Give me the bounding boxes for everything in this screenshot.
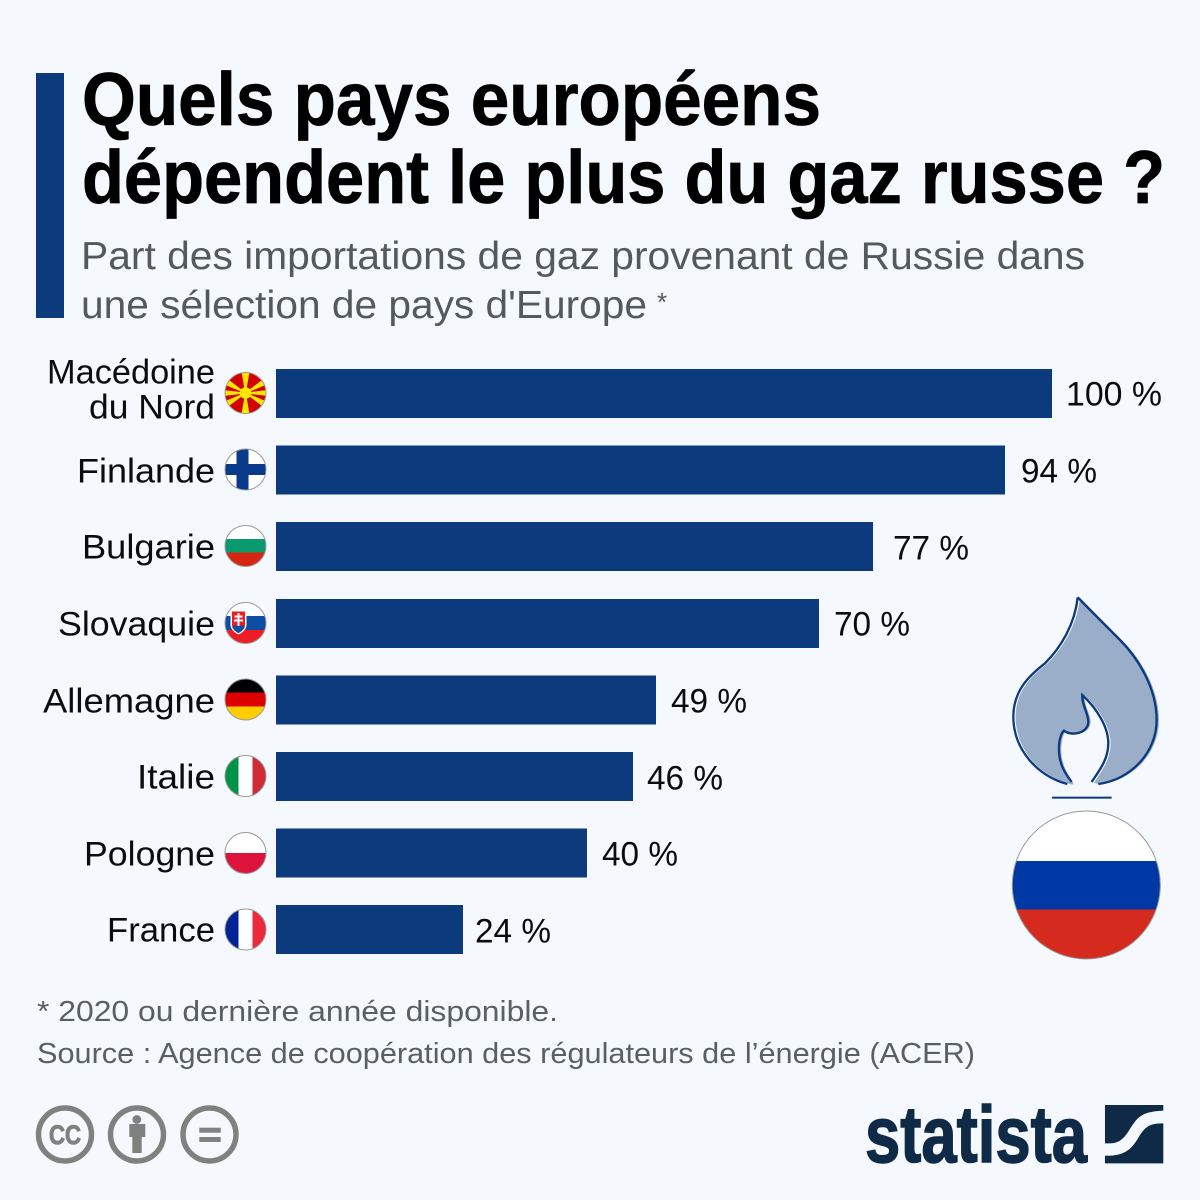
row: Macédoine du Nord: 100 % <box>1066 376 1162 414</box>
row: France <box>107 905 551 954</box>
source: Source : Agence de coopération des régulateurs de l’énergie (ACER) <box>37 1038 975 1070</box>
row: Macédoine du Nord: Macédoine <box>47 354 215 392</box>
row: Allemagne: 49 % <box>671 682 747 720</box>
icon: Russian flag <box>1010 810 1162 960</box>
title: Quels pays européens <box>82 57 821 141</box>
row: Bulgarie: Bulgarie <box>82 528 215 566</box>
subtitle: une sélection de pays d'Europe <box>81 284 647 327</box>
row: Italie <box>137 752 723 801</box>
subtitle: * <box>657 287 667 317</box>
icon: gas flame <box>1013 597 1159 799</box>
footnote: * 2020 ou dernière année disponible. <box>37 996 558 1028</box>
title <box>82 57 1165 219</box>
row: Finlande <box>77 446 1097 494</box>
row: France: France <box>107 912 215 950</box>
row: Finlande: 94 % <box>1021 452 1097 490</box>
row: France: 24 % <box>475 912 551 950</box>
row: Slovaquie: 70 % <box>834 606 910 644</box>
row: Macédoine du Nord <box>50 358 1161 419</box>
row: Bulgarie <box>82 522 969 571</box>
icon: attribution <box>110 1108 164 1161</box>
accent bar <box>36 73 64 318</box>
icon: creative commons: CC <box>49 1120 81 1150</box>
row: Pologne <box>84 828 678 878</box>
subtitle: Part des importations de gaz provenant de Russie dans <box>81 235 1085 278</box>
bar chart <box>43 354 1162 954</box>
row: Slovaquie: Slovaquie <box>58 606 215 644</box>
row: Macédoine du Nord: du Nord <box>89 388 215 426</box>
row: Pologne: Pologne <box>84 836 215 874</box>
row: Italie: Italie <box>137 758 215 796</box>
row: Allemagne <box>43 676 747 724</box>
row: Allemagne: Allemagne <box>43 682 215 720</box>
row: Bulgarie: 77 % <box>893 530 969 568</box>
row: Italie: 46 % <box>647 760 723 798</box>
row: Slovaquie <box>58 599 910 648</box>
subtitle <box>81 235 1085 327</box>
row: Pologne: 40 % <box>602 836 678 874</box>
icon: no derivatives <box>183 1108 236 1161</box>
statista wordmark: statista <box>865 1090 1087 1179</box>
statista logo mark <box>1105 1105 1163 1163</box>
row: Finlande: Finlande <box>77 452 215 490</box>
icon: creative commons <box>38 1108 92 1161</box>
